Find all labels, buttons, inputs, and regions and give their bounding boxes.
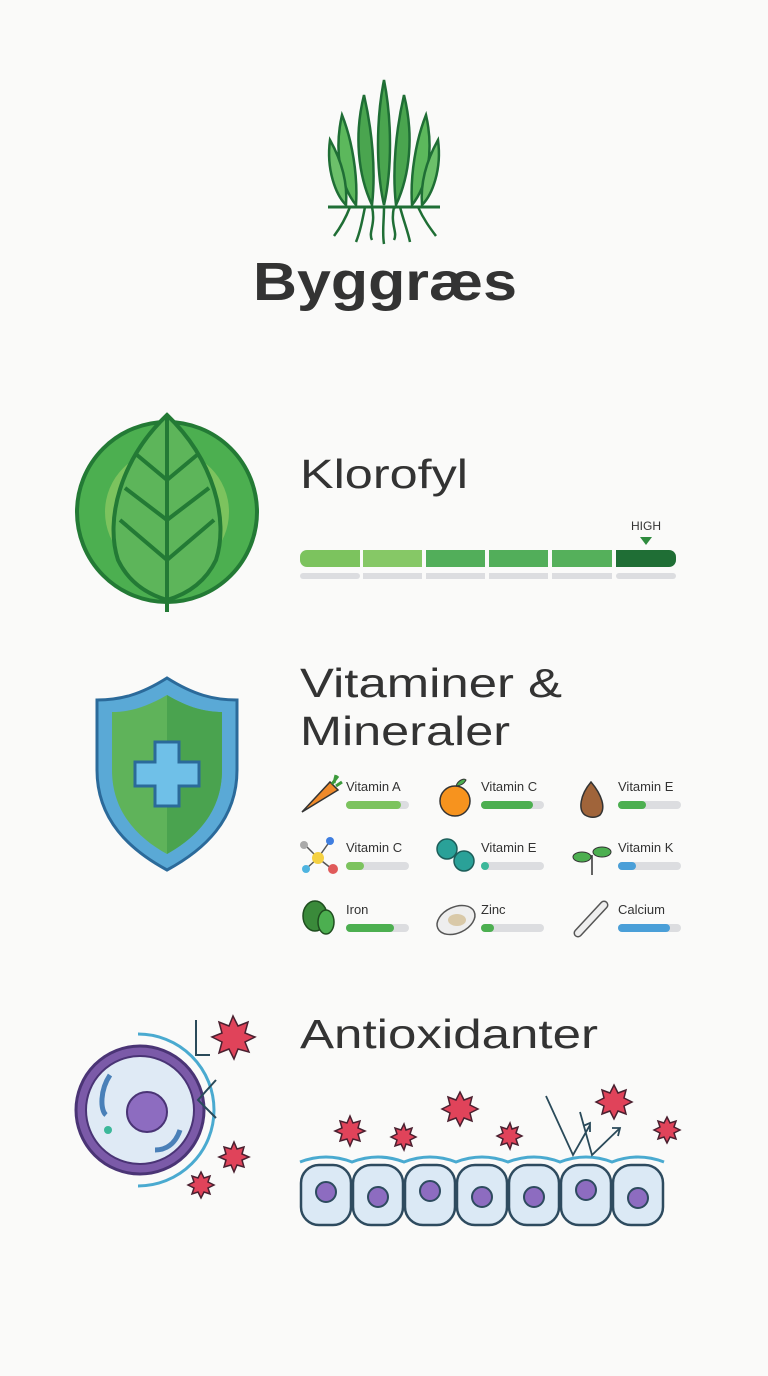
heading: Klorofyl: Klorofyl xyxy=(300,451,468,497)
grid: nutrients xyxy=(300,775,681,940)
item: Vitamin A xyxy=(302,775,409,812)
item: Iron spinach: Iron xyxy=(346,902,368,917)
item: Vitamin C molecule xyxy=(300,837,409,874)
chart: chlorophyll level bar: HIGH xyxy=(631,519,661,533)
heading: Antioxidanter: Antioxidanter xyxy=(300,1011,598,1057)
item: Calcium bone xyxy=(578,902,681,933)
item: Vitamin E: Vitamin E xyxy=(618,779,674,794)
item: Vitamin A: Vitamin A xyxy=(346,779,401,794)
item: Vitamin E capsules xyxy=(437,839,544,871)
chart: chlorophyll level bar xyxy=(300,519,676,579)
item: Vitamin C molecule: Vitamin C xyxy=(346,840,402,855)
item: Zinc oyster: Zinc xyxy=(481,902,506,917)
item: Vitamin C: Vitamin C xyxy=(481,779,537,794)
item: Calcium bone: Calcium xyxy=(618,902,665,917)
icon: shield xyxy=(97,678,237,870)
item: Iron spinach xyxy=(303,901,409,934)
icon: cell with free radicals xyxy=(76,1016,255,1198)
item: Vitamin K sprout xyxy=(573,840,681,875)
item: Vitamin E xyxy=(581,779,681,817)
item: Zinc oyster xyxy=(432,900,544,940)
item: Vitamin C xyxy=(440,779,544,816)
illustration: cell layer under radicals xyxy=(300,1085,680,1225)
icon: leaf circle xyxy=(77,415,257,612)
icon: barley grass xyxy=(328,80,440,244)
item: Vitamin E capsules: Vitamin E xyxy=(481,840,537,855)
item: Vitamin K sprout: Vitamin K xyxy=(618,840,674,855)
title: Byggræs xyxy=(253,252,517,312)
heading: Vitaminer & Mineraler: Vitaminer & xyxy=(300,660,562,706)
heading: Vitaminer & Mineraler: Mineraler xyxy=(300,708,510,754)
